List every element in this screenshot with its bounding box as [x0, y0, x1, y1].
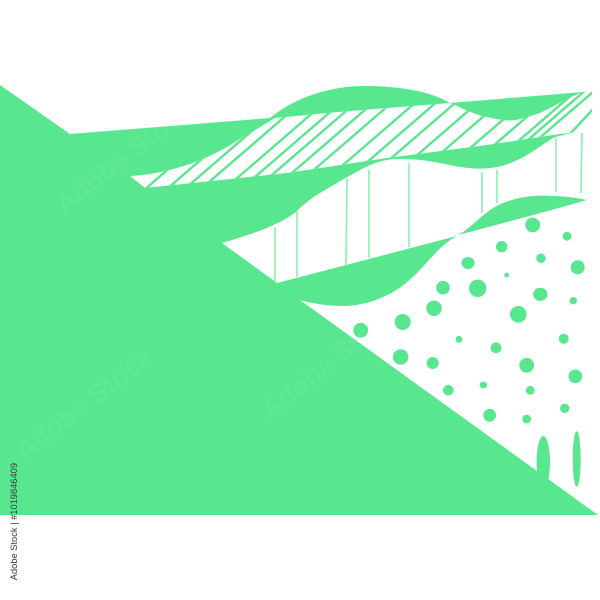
watermark text: [10, 94, 405, 467]
hatched wave band: [130, 91, 592, 188]
watermark text: Adobe Stock: [10, 341, 160, 467]
tall ovals: [537, 431, 581, 488]
hatch background: [130, 91, 592, 188]
image id caption: Adobe Stock | #1019846409: [9, 463, 19, 580]
dot field: [353, 218, 585, 423]
thin vertical lines: [275, 133, 582, 282]
watermark text: Adobe Stock: [255, 299, 405, 425]
diagonal stripes: [144, 91, 592, 188]
upper right leaf shape: [458, 196, 587, 235]
watermark text: Adobe Stock: [50, 94, 200, 220]
main green silhouette: [0, 85, 598, 515]
